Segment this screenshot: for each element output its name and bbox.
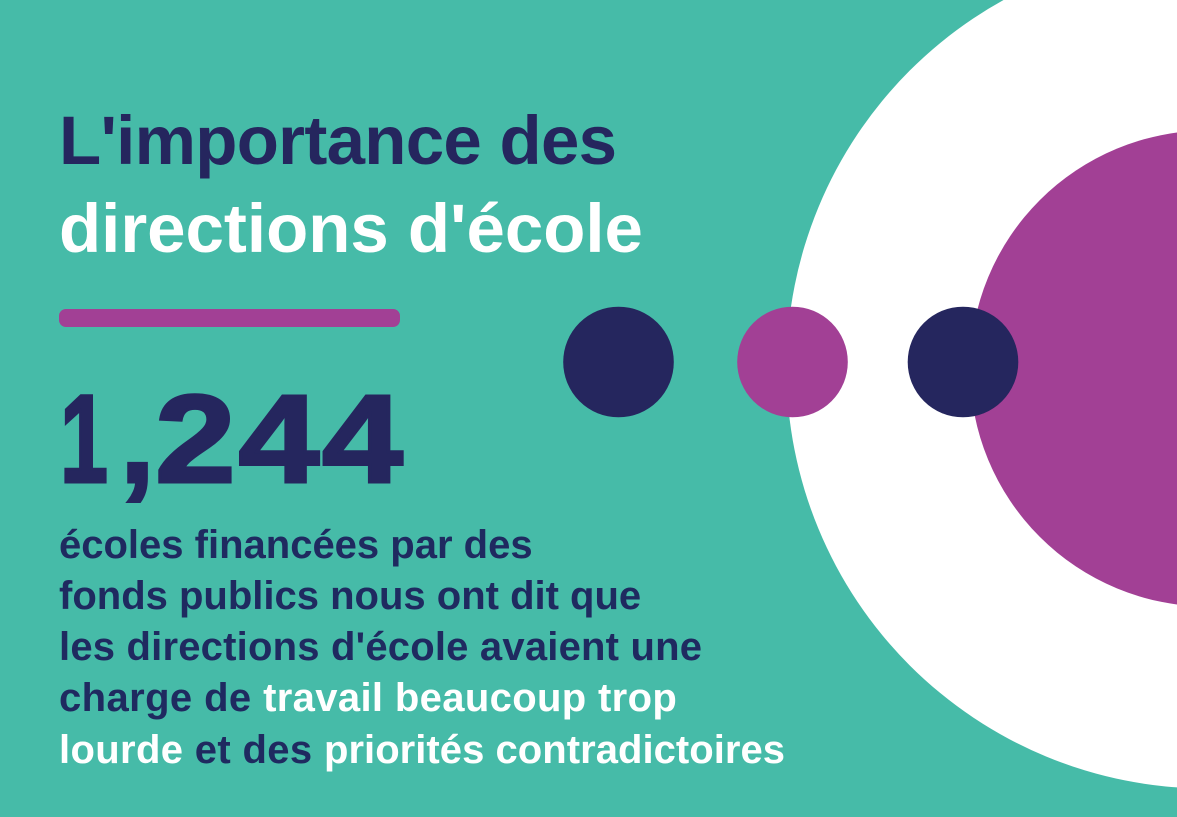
description text: les directions d'école avaient une	[59, 625, 702, 669]
description text: charge de travail beaucoup trop	[59, 676, 677, 720]
title	[59, 102, 643, 266]
title line 1: L'importance des	[59, 102, 616, 178]
big number: 1	[60, 370, 108, 509]
description text: écoles financées par des	[59, 522, 533, 566]
description text: fonds publics nous ont dit que	[59, 574, 641, 618]
big number: 244	[154, 370, 405, 509]
purple divider bar	[59, 309, 400, 327]
description text: lourde et des priorités contradictoires	[59, 728, 785, 772]
dot: navy right	[908, 307, 1018, 417]
dot: navy left	[563, 307, 674, 417]
big number: ,	[120, 370, 155, 509]
dot: purple middle	[737, 307, 848, 417]
purple inner circle	[970, 130, 1177, 606]
white large circle	[786, 0, 1177, 788]
title line 2: directions d'école	[59, 190, 643, 266]
description text	[59, 522, 785, 772]
